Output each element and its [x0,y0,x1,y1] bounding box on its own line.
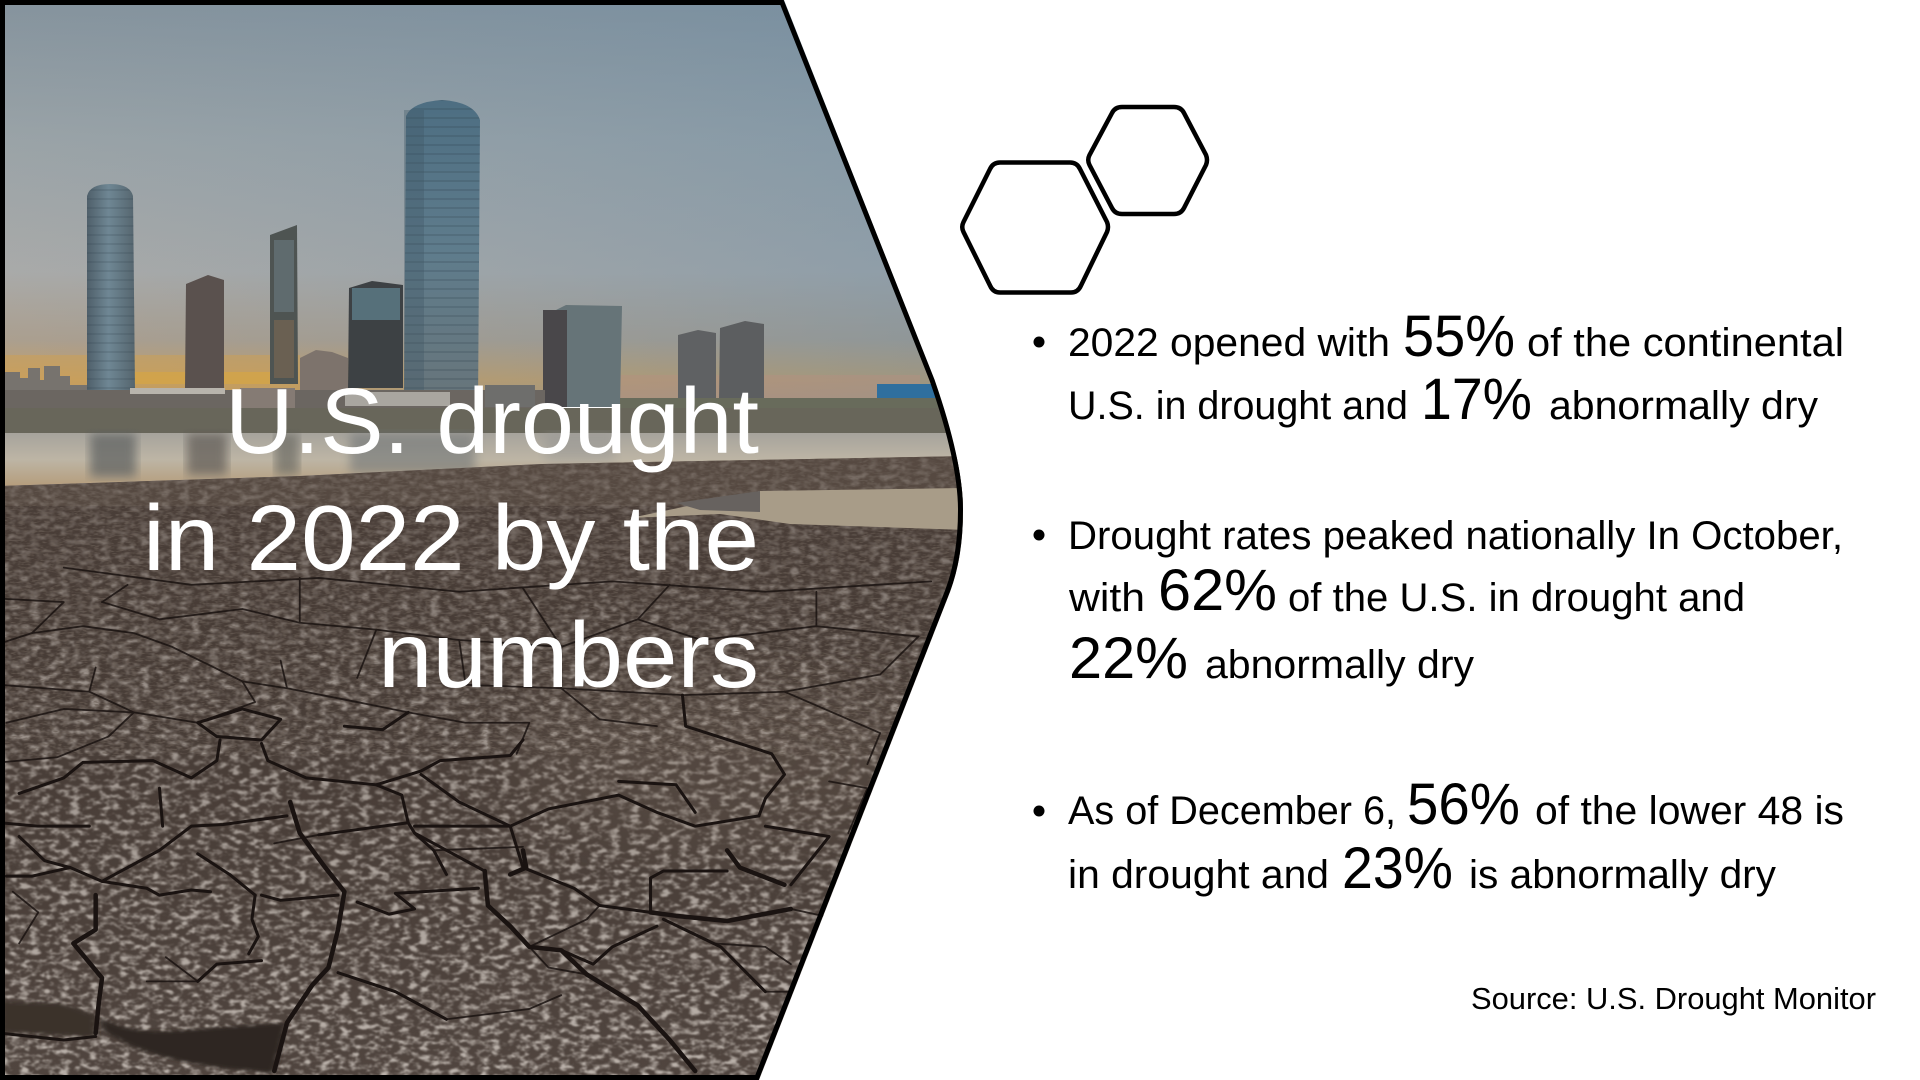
bullet [1034,806,1044,816]
text block: December figures: 56% [1407,772,1520,837]
icon: small hexagon [1088,107,1207,214]
shallow pool [630,488,965,530]
title: in 2022 by the [143,486,759,590]
text block: October peak figures: of the U.S. in drought and [1288,576,1745,620]
river and reflections [0,433,970,486]
riverbank [0,408,970,433]
text block: December figures [1034,772,1844,901]
text block: December figures: of the lower 48 is [1535,789,1844,833]
text block: December figures: in drought and [1068,853,1329,897]
text block: 2022 opening figures [1034,304,1844,432]
text block: 2022 opening figures: abnormally dry [1549,384,1818,428]
cracked ground [0,456,970,1080]
icon: hexagons [962,107,1207,292]
bullet [1034,336,1044,348]
text block: October peak figures: abnormally dry [1205,643,1474,687]
text block: 2022 opening figures: U.S. in drought and [1068,384,1408,428]
text block: December figures: As of December 6, [1068,789,1396,833]
icon: large hexagon [962,162,1108,292]
text block: December figures: 23% [1342,836,1453,901]
sky [0,0,970,400]
text block: October peak figures: 22% [1069,626,1188,691]
title [143,369,759,707]
text block: October peak figures: 62% [1158,558,1277,623]
ground cracks [0,568,931,1073]
image border [2,2,960,1078]
text block: 2022 opening figures: 2022 opened with [1068,321,1390,365]
bullet [1034,530,1044,540]
source note: Source: U.S. Drought Monitor [1471,981,1876,1016]
text block: 2022 opening figures: of the continental [1527,321,1844,365]
text block: October peak figures: with [1068,576,1145,620]
text block: October peak figures [1034,514,1843,691]
city skyline [5,100,940,410]
text block: 2022 opening figures: 17% [1421,367,1532,432]
text block: October peak figures: Drought rates peaked nationally In October, [1068,514,1843,558]
panel: drought city photo [0,0,970,1080]
text block: 2022 opening figures: 55% [1403,304,1515,369]
title: numbers [378,603,759,707]
text block: December figures: is abnormally dry [1469,853,1776,897]
title: U.S. drought [225,369,759,473]
